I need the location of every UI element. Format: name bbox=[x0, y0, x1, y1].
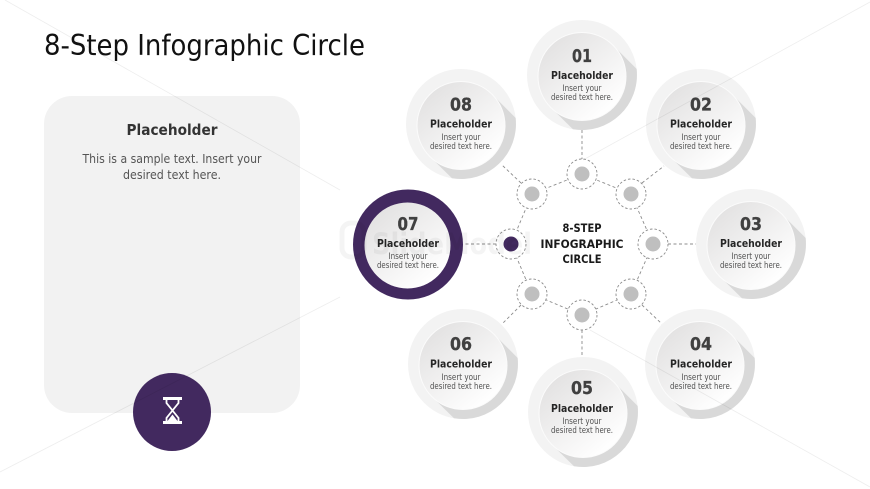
panel body text bbox=[82, 151, 262, 182]
step 08: 08 bbox=[450, 94, 472, 116]
step 02: Placeholder bbox=[670, 118, 733, 130]
step 07 (active) bbox=[353, 190, 463, 300]
center label: CIRCLE bbox=[562, 252, 602, 266]
step 07 (active): Insert your bbox=[388, 252, 428, 262]
step 04: 04 bbox=[690, 334, 712, 355]
step 03: Placeholder bbox=[720, 238, 783, 250]
step 06: 06 bbox=[450, 334, 472, 355]
step 07 (active): desired text here. bbox=[377, 261, 439, 271]
step 04 bbox=[645, 309, 755, 419]
panel body text: This is a sample text. Insert your bbox=[82, 151, 262, 166]
step 08 bbox=[406, 69, 516, 179]
center label: INFOGRAPHIC bbox=[540, 237, 624, 251]
title: 8-Step Infographic Circle bbox=[44, 29, 365, 62]
step 08: desired text here. bbox=[430, 142, 492, 152]
panel body text: desired text here. bbox=[123, 167, 221, 182]
step 06: Placeholder bbox=[430, 358, 493, 370]
step 07 (active): 07 bbox=[398, 214, 418, 235]
icon: hourglass badge bbox=[133, 373, 211, 451]
step 06: Insert your bbox=[442, 373, 481, 383]
step 01 bbox=[527, 20, 637, 130]
center label bbox=[540, 221, 624, 266]
watermark bbox=[342, 223, 532, 261]
step 01: Insert your bbox=[562, 84, 602, 94]
step 04: Placeholder bbox=[670, 358, 733, 370]
step 05: 05 bbox=[571, 378, 593, 399]
watermark: SlideModel bbox=[372, 227, 532, 261]
step 02: Insert your bbox=[682, 133, 721, 143]
step 03: Insert your bbox=[732, 252, 771, 262]
center label: 8-STEP bbox=[562, 221, 602, 235]
step 02: 02 bbox=[690, 94, 712, 116]
step 05: desired text here. bbox=[551, 426, 613, 436]
connector network bbox=[463, 130, 696, 358]
step 01: 01 bbox=[572, 46, 592, 67]
step 04: Insert your bbox=[682, 373, 721, 383]
step 05: Insert your bbox=[562, 417, 602, 427]
step 06 bbox=[408, 309, 518, 419]
step 01: Placeholder bbox=[551, 70, 614, 82]
active node: step 07 bbox=[496, 229, 526, 259]
step 02: desired text here. bbox=[670, 142, 732, 152]
step 03: 03 bbox=[740, 214, 762, 235]
node dots bbox=[517, 159, 668, 330]
panel: description bbox=[44, 96, 300, 413]
step 07 (active): Placeholder bbox=[377, 238, 440, 250]
step 02 bbox=[646, 69, 756, 179]
step 08: Placeholder bbox=[430, 118, 493, 130]
step 06: desired text here. bbox=[430, 382, 492, 392]
step 03: desired text here. bbox=[720, 261, 782, 271]
step 03 bbox=[696, 189, 806, 299]
step 05: Placeholder bbox=[551, 403, 614, 415]
panel heading: Placeholder bbox=[126, 121, 218, 139]
step 05 bbox=[528, 357, 638, 467]
step 08: Insert your bbox=[442, 133, 481, 143]
step 01: desired text here. bbox=[551, 93, 613, 103]
step 04: desired text here. bbox=[670, 382, 732, 392]
